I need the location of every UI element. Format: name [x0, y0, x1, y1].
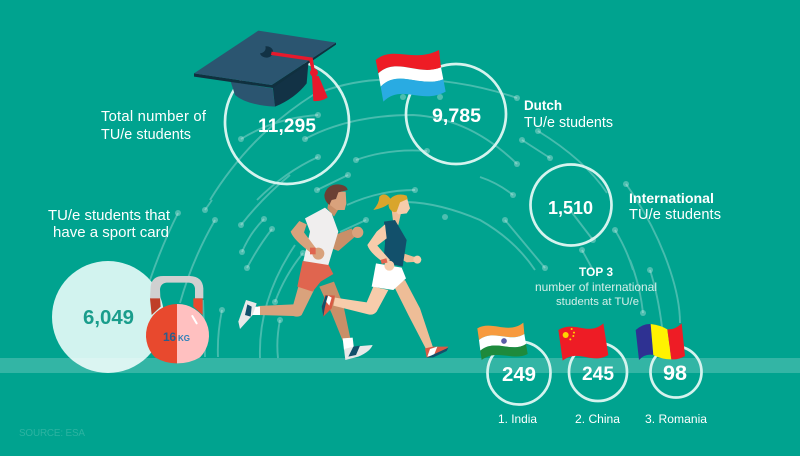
label: sport card [48, 208, 171, 241]
concentric track arcs with dots [150, 79, 680, 358]
label: international students [629, 191, 721, 223]
number: china: 245 [582, 364, 614, 385]
label: total students: TU/e students [101, 127, 191, 143]
number: dutch students: 9,785 [432, 105, 481, 127]
label: sport card: have a sport card [53, 224, 169, 241]
label: sport card: TU/e students that [48, 208, 171, 224]
source: SOURCE: ESA [19, 428, 85, 439]
runner: woman [322, 194, 448, 358]
number: international students: 1,510 [548, 198, 593, 218]
number: india: 249 [502, 364, 536, 386]
label: india: 1. India [498, 412, 537, 426]
label: top 3 [535, 265, 657, 308]
label: top 3: TOP 3 [579, 265, 613, 279]
label: top 3: students at TU/e [556, 296, 639, 308]
number: romania: 98 [663, 360, 687, 385]
kettlebell weight label: KG [178, 334, 190, 343]
ground band [0, 358, 800, 373]
international students ring [530, 164, 612, 246]
dutch students ring [406, 64, 506, 164]
sport card circle [52, 261, 164, 373]
icon: india flag [477, 323, 528, 360]
number: sport card: 6,049 [83, 307, 134, 329]
label: top 3: number of international [535, 280, 657, 294]
india ring [488, 342, 550, 404]
label: romania: 3. Romania [645, 412, 707, 426]
label: dutch students [524, 98, 613, 131]
icon: dutch flag [376, 50, 446, 102]
icon: romania flag [636, 323, 685, 360]
kettlebell weight label [163, 330, 190, 344]
label: china: 2. China [575, 412, 620, 426]
label: dutch students: TU/e students [524, 115, 613, 131]
illustration: runners [238, 184, 448, 360]
label: dutch students: Dutch [524, 98, 562, 113]
kettlebell weight label: 16 [163, 330, 176, 344]
label: international students: International [629, 191, 714, 207]
total students ring [225, 60, 349, 184]
label: international students: TU/e students [629, 207, 721, 223]
label: total students [101, 109, 207, 143]
icon: graduation cap [194, 31, 336, 107]
china ring [569, 343, 627, 401]
label: total students: Total number of [101, 109, 207, 125]
icon: kettlebell [146, 276, 209, 363]
romania ring [650, 346, 702, 398]
number: total students: 11,295 [258, 116, 316, 137]
icon: china flag [558, 323, 608, 361]
runner: man [238, 184, 373, 360]
